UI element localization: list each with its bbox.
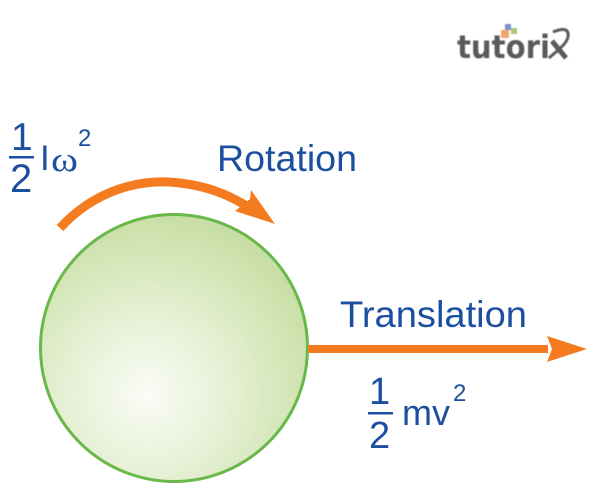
label: Translation: Translation — [340, 293, 527, 335]
formula: translational energy: 1 — [369, 371, 390, 413]
formula: rotational energy — [9, 116, 91, 201]
arrow: translation — [308, 336, 587, 362]
sphere — [40, 214, 308, 482]
formula: rotational energy: 1 — [11, 116, 33, 159]
label: Rotation: Rotation — [217, 137, 357, 179]
formula: rotational energy: ω — [51, 140, 78, 179]
formula: translational energy — [368, 371, 466, 457]
arrow: rotation — [60, 182, 275, 228]
formula: rotational energy: 2 — [10, 157, 32, 201]
formula: translational energy: 2 — [369, 415, 390, 457]
formula: rotational energy: I — [40, 139, 50, 178]
formula: rotational energy: 2 — [78, 125, 91, 152]
logo: tutorix: tutori — [457, 28, 550, 66]
formula: translational energy: 2 — [453, 380, 466, 407]
formula: translational energy: mv — [402, 392, 450, 433]
